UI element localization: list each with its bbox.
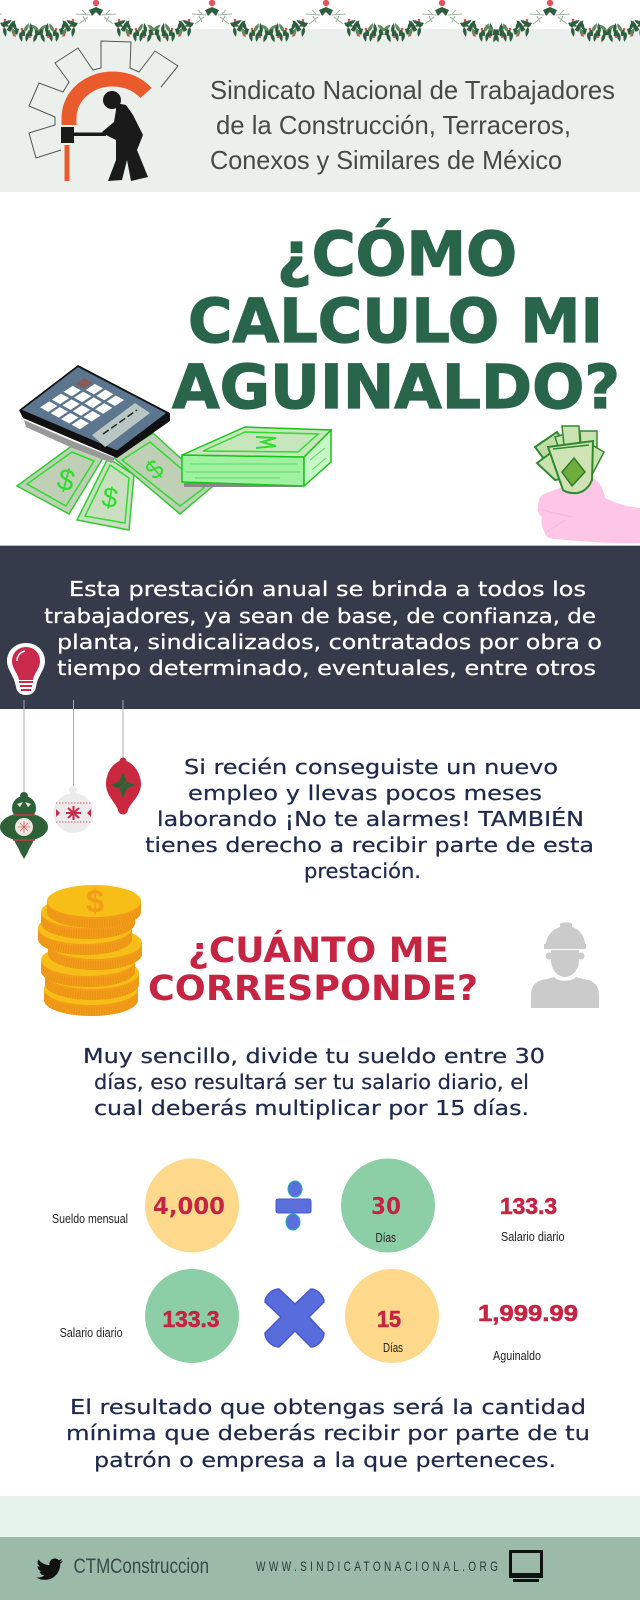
text block: new employees: Si recién conseguiste un nuevo bbox=[184, 755, 558, 779]
icon: multiplication sign bbox=[265, 1289, 324, 1347]
text block: conclusion: mínima que deberás recibir por parte de tu bbox=[66, 1421, 590, 1445]
middle bill bbox=[77, 458, 134, 530]
icon: construction worker bbox=[531, 922, 599, 1008]
circle: 4,000: 4,000 bbox=[153, 1194, 225, 1220]
decorative band bbox=[0, 1496, 640, 1537]
website: WWW.SINDICATONACIONAL.ORG bbox=[256, 1558, 498, 1574]
circle: 30 days bbox=[341, 1158, 435, 1252]
result: daily salary: 133.3 bbox=[500, 1193, 557, 1219]
intro text bbox=[44, 577, 602, 680]
circle: 15 days: Días bbox=[383, 1341, 403, 1355]
panel: footer bbox=[0, 1537, 640, 1600]
icon: gold coins bbox=[35, 883, 145, 1016]
heading: union name: Sindicato Nacional de Trabajadores bbox=[210, 75, 615, 105]
text block: new employees: tienes derecho a recibir parte de esta bbox=[145, 833, 594, 857]
heading: how much: ¿CUÁNTO ME bbox=[188, 929, 449, 971]
title: AGUINALDO? bbox=[172, 352, 620, 423]
circle: 4,000 bbox=[145, 1158, 239, 1252]
intro text: trabajadores, ya sean de base, de confianza, de bbox=[44, 604, 596, 628]
calculator bbox=[19, 365, 170, 463]
text block: conclusion: patrón o empresa a la que perteneces. bbox=[94, 1448, 556, 1472]
title: CALCULO MI bbox=[188, 286, 603, 357]
result: bonus: 1,999.99 bbox=[478, 1300, 578, 1326]
intro text: tiempo determinado, eventuales, entre otros bbox=[57, 656, 596, 680]
calculation row 1 bbox=[52, 1158, 565, 1252]
circle: 133.3: 133.3 bbox=[162, 1306, 220, 1332]
ornament: green bbox=[0, 792, 48, 859]
text block: new employees: laborando ¡No te alarmes! TAMBIÉN bbox=[157, 806, 584, 831]
icon: light bulb bbox=[7, 643, 45, 695]
ornament: red bbox=[106, 758, 141, 814]
ornaments bbox=[0, 700, 141, 859]
text block: explanation: cual deberás multiplicar por 15 días. bbox=[94, 1096, 529, 1120]
left bill bbox=[17, 445, 103, 514]
heading: union name: de la Construcción, Terraceros, bbox=[216, 110, 571, 140]
ornament: white ball bbox=[54, 786, 94, 833]
icon: twitter bird bbox=[36, 1558, 63, 1580]
left bill: $ bbox=[54, 462, 79, 499]
intro text: planta, sindicalizados, contratados por obra o bbox=[57, 630, 602, 654]
text block: explanation bbox=[83, 1044, 545, 1120]
icon: hand holding money bbox=[535, 426, 640, 543]
circle: 15 days: 15 bbox=[377, 1306, 401, 1332]
icon: stack of bills bbox=[182, 427, 331, 487]
label: daily salary: Salario diario bbox=[60, 1326, 123, 1340]
right bill bbox=[114, 433, 212, 514]
circle: 30 days: 30 bbox=[371, 1194, 401, 1220]
text block: conclusion: El resultado que obtengas será la cantidad bbox=[70, 1395, 586, 1419]
result: daily salary: Salario diario bbox=[501, 1230, 565, 1244]
heading: how much: CORRESPONDE? bbox=[148, 969, 478, 1009]
intro text: Esta prestación anual se brinda a todos los bbox=[69, 577, 586, 601]
twitter handle: CTMConstruccion bbox=[74, 1555, 209, 1578]
circle: 30 days: Días bbox=[376, 1231, 396, 1245]
label: monthly salary: Sueldo mensual bbox=[52, 1212, 128, 1226]
result: bonus bbox=[478, 1300, 578, 1363]
panel: intro band bbox=[0, 545, 640, 709]
heading: union name bbox=[210, 75, 615, 175]
right bill: $ bbox=[139, 453, 170, 485]
text block: new employees bbox=[145, 755, 594, 883]
icon: division sign bbox=[276, 1181, 311, 1230]
circle: 133.3 bbox=[145, 1269, 239, 1363]
text block: explanation: días, eso resultará ser tu salario diario, el bbox=[94, 1070, 529, 1094]
icon: monitor bbox=[510, 1552, 543, 1582]
result: bonus: Aguinaldo bbox=[493, 1349, 541, 1363]
calculation row 2 bbox=[60, 1269, 578, 1363]
heading: union name: Conexos y Similares de México bbox=[210, 145, 562, 175]
title: ¿CÓMO bbox=[277, 219, 517, 290]
middle bill: $ bbox=[100, 481, 121, 514]
heading: how much bbox=[148, 929, 478, 1009]
result: daily salary bbox=[500, 1193, 565, 1244]
text block: new employees: empleo y llevas pocos meses bbox=[188, 781, 542, 805]
logo: union gear and worker bbox=[29, 41, 178, 181]
title bbox=[172, 219, 620, 423]
text block: new employees: prestación. bbox=[304, 859, 421, 883]
text block: explanation: Muy sencillo, divide tu sueldo entre 30 bbox=[83, 1044, 545, 1068]
icon: gold coins: $ bbox=[86, 883, 104, 919]
icon: calculator and bills bbox=[17, 365, 212, 530]
circle: 15 days bbox=[345, 1269, 439, 1363]
text block: conclusion bbox=[66, 1395, 590, 1472]
panel: header background bbox=[0, 29, 640, 192]
garland decoration bbox=[0, 0, 640, 43]
